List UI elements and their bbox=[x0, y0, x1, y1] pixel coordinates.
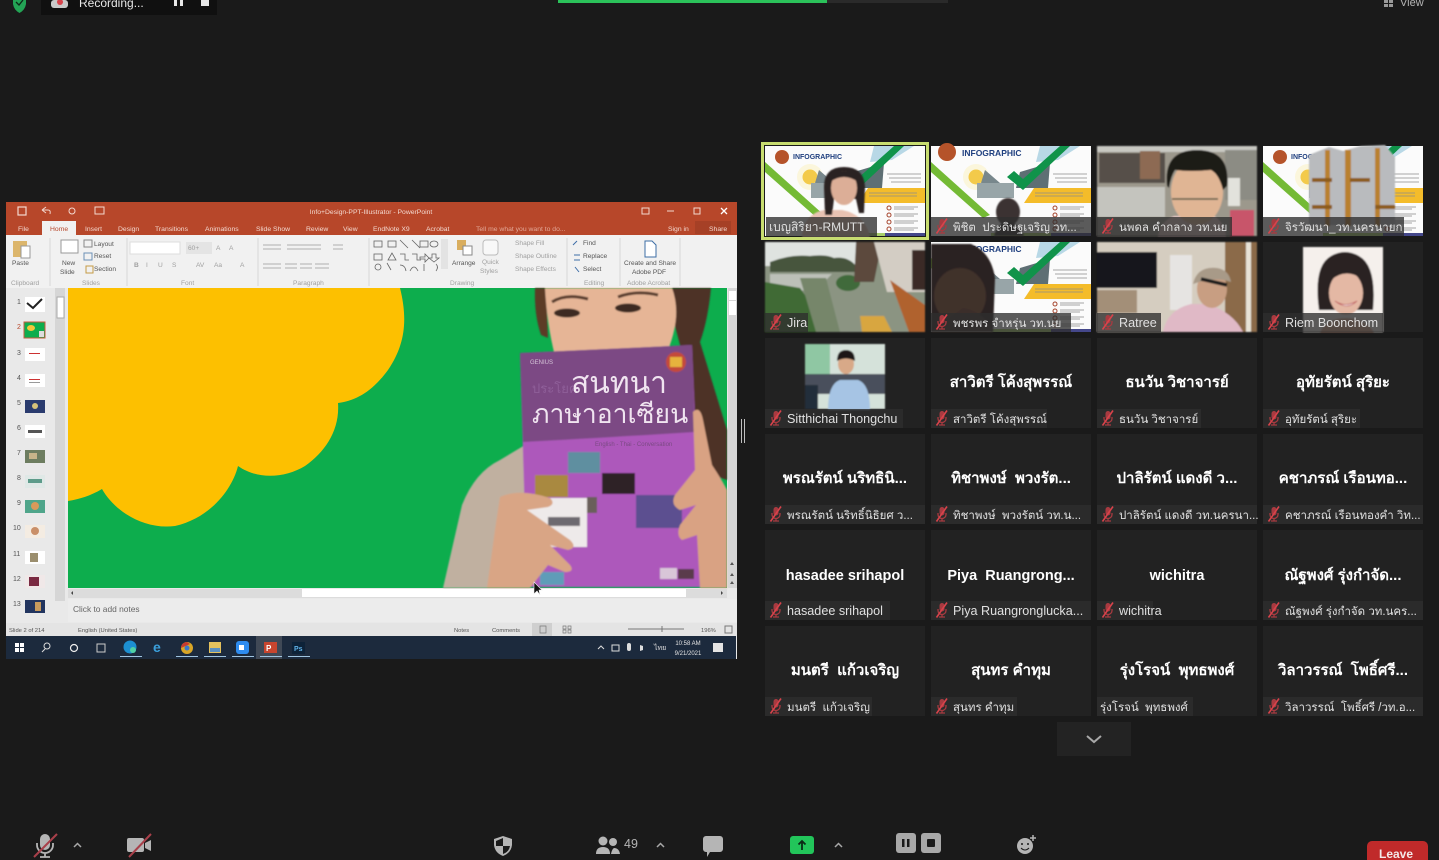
tile: พรณรัตน์ นริทธินิ...: พรณรัตน์ นริทธินิ... bbox=[783, 469, 907, 487]
tile: เบญสิริยา-RMUTT: เบญสิริยา-RMUTT bbox=[769, 220, 865, 234]
photo: woman holding a book: สนทนา bbox=[571, 367, 667, 400]
tile: สุนทร คำทุม bbox=[931, 626, 1091, 716]
ribbon: Select bbox=[583, 266, 601, 273]
tile: hasadee srihapol: hasadee srihapol bbox=[787, 604, 883, 618]
Windows taskbar: ไทย bbox=[653, 643, 666, 652]
tile: ปาลิรัตน์ แดงดี ว... bbox=[1097, 434, 1259, 524]
active speaker highlight bbox=[762, 144, 928, 238]
ribbon: Shape Fill bbox=[515, 240, 545, 247]
toolbar: chat bbox=[703, 836, 723, 857]
tile: สาวิตรี โค้งสุพรรณ์: สาวิตรี โค้งสุพรรณ์ bbox=[950, 372, 1072, 392]
tile: สาวิตรี โค้งสุพรรณ์ bbox=[931, 338, 1091, 428]
tile: เบญสิริยา-RMUTT: INFOGRAPHIC bbox=[793, 154, 842, 161]
toolbar: muted microphone bbox=[34, 834, 81, 857]
slide thumbnail pane: 10 bbox=[13, 525, 21, 532]
title bar: Design bbox=[118, 226, 139, 233]
tile: พิชิต ประดิษฐเจริญ: INFOGRAPHIC bbox=[962, 148, 1022, 158]
ribbon: U bbox=[158, 262, 163, 269]
slide thumbnail pane: 7 bbox=[17, 450, 21, 457]
tile: คชาภรณ์ เรือนทอ... bbox=[1263, 434, 1423, 524]
title bar: Info+Design-PPT-Illustrator - PowerPoint bbox=[310, 209, 432, 216]
ribbon: A bbox=[240, 262, 245, 269]
tile: ธนวัน วิชาจารย์ bbox=[1097, 338, 1257, 428]
panel: shared PowerPoint window bbox=[6, 202, 737, 659]
toolbar: stopped video bbox=[127, 834, 151, 857]
photo: woman holding a book: English - Thai - Conversation bbox=[595, 442, 672, 448]
tile: รุ่งโรจน์ พุทธพงศ์ bbox=[1097, 626, 1257, 716]
status bar: Slide 2 of 214 bbox=[9, 628, 45, 634]
ribbon: Replace bbox=[583, 253, 608, 260]
ribbon: AV bbox=[196, 262, 205, 269]
ribbon: Clipboard bbox=[11, 280, 40, 287]
tile: ปาลิรัตน์ แดงดี ว...: ปาลิรัตน์ แดงดี ว... bbox=[1117, 469, 1237, 487]
tile: พชรพร จำหรุ่น bbox=[931, 242, 1091, 332]
tile: วิลาวรรณ์ โพธิ์ศรี... bbox=[1263, 626, 1423, 716]
shoulder bbox=[443, 445, 525, 588]
tile: วิลาวรรณ์ โพธิ์ศรี...: วิลาวรรณ์ โพธิ์ศรี... bbox=[1277, 658, 1408, 679]
tile: สุนทร คำทุม: สุนทร คำทุม bbox=[971, 662, 1051, 680]
slide thumbnail pane bbox=[6, 288, 68, 613]
tile: พิชิต ประดิษฐเจริญ: พิชิต ประดิษฐเจริญ วท... bbox=[953, 221, 1077, 234]
status bar: Comments bbox=[492, 628, 520, 634]
tile: สาวิตรี โค้งสุพรรณ์: สาวิตรี โค้งสุพรรณ์ bbox=[953, 412, 1047, 426]
Windows taskbar: Ps bbox=[294, 646, 303, 653]
tile: สุนทร คำทุม: สุนทร คำทุม bbox=[953, 701, 1014, 714]
tile: เบญสิริยา-RMUTT bbox=[765, 146, 925, 236]
status bar: 196% bbox=[701, 628, 716, 634]
slide scrollbars bbox=[68, 288, 737, 598]
title bar: Review bbox=[306, 226, 328, 233]
leave button bbox=[1367, 841, 1428, 860]
title bar: View bbox=[343, 226, 358, 233]
tile: รุ่งโรจน์ พุทธพงศ์: รุ่งโรจน์ พุทธพงศ์ bbox=[1100, 700, 1189, 714]
tile: ธนวัน วิชาจารย์: ธนวัน วิชาจารย์ bbox=[1119, 412, 1198, 426]
ribbon: Adobe PDF bbox=[632, 269, 666, 276]
ribbon: Paste bbox=[12, 260, 29, 267]
title bar: Slide Show bbox=[256, 226, 290, 233]
tile: Sitthichai Thongchu bbox=[765, 338, 925, 428]
tile: Riem Boonchom: Riem Boonchom bbox=[1285, 316, 1378, 330]
Windows taskbar bbox=[6, 636, 736, 659]
tile: ณัฐพงศ์ รุ่งกำจัด...: ณัฐพงศ์ รุ่งกำจัด วท.นคร... bbox=[1285, 604, 1417, 618]
status bar: Notes bbox=[454, 628, 469, 634]
ribbon: Section bbox=[94, 266, 116, 273]
yellow scalloped shape bbox=[68, 288, 404, 527]
photo: woman holding a book: ภาษาอาเซียน bbox=[532, 399, 688, 429]
tile: hasadee srihapol bbox=[765, 530, 925, 620]
ribbon: Reset bbox=[94, 253, 111, 260]
panel: participant gallery bbox=[762, 143, 1423, 716]
slide thumbnail pane: 8 bbox=[17, 475, 21, 482]
title bar: Transitions bbox=[155, 226, 189, 233]
slide thumbnail pane: 13 bbox=[13, 601, 21, 608]
tile: ณัฐพงศ์ รุ่งกำจัด...: ณัฐพงศ์ รุ่งกำจัด... bbox=[1284, 566, 1402, 585]
tile: มนตรี แก้วเจริญ bbox=[765, 626, 925, 716]
slide thumbnail pane: 4 bbox=[17, 375, 21, 382]
slide thumbnail pane: 9 bbox=[17, 500, 21, 507]
tile: ณัฐพงศ์ รุ่งกำจัด... bbox=[1263, 530, 1423, 620]
ribbon: Create and Share bbox=[624, 260, 676, 267]
title bar: EndNote X9 bbox=[373, 226, 410, 233]
ribbon: Shape Outline bbox=[515, 253, 557, 260]
tile: ทิชาพงษ์ พวงรัต...: ทิชาพงษ์ พวงรัตน์ วท.น... bbox=[953, 508, 1081, 522]
slide thumbnail pane: 12 bbox=[13, 576, 21, 583]
ribbon: Adobe Acrobat bbox=[627, 280, 670, 287]
toolbar: reactions bbox=[1017, 835, 1036, 854]
tile: อุทัยรัตน์ สุริยะ: อุทัยรัตน์ สุริยะ bbox=[1296, 373, 1390, 392]
ribbon: S bbox=[172, 262, 177, 269]
next page chevron button bbox=[1057, 722, 1131, 756]
ribbon: New bbox=[62, 260, 75, 267]
tile: wichitra: wichitra bbox=[1149, 568, 1205, 584]
tile: จิรวัฒนา_วท.นครนายก: INFOGRA bbox=[1291, 154, 1323, 161]
Windows taskbar: e bbox=[153, 639, 161, 655]
ribbon: Drawing bbox=[450, 280, 475, 287]
tile: ทิชาพงษ์ พวงรัต...: ทิชาพงษ์ พวงรัต... bbox=[951, 469, 1071, 487]
ribbon: Layout bbox=[94, 241, 114, 248]
tile: Piya Ruangrong... bbox=[931, 530, 1091, 620]
hands bbox=[673, 410, 727, 588]
ribbon bbox=[6, 235, 737, 288]
face bbox=[545, 288, 676, 356]
title bar: Acrobat bbox=[426, 226, 450, 233]
toolbar: recording controls bbox=[896, 833, 941, 853]
photo: woman holding a book: ประโยค bbox=[532, 381, 578, 396]
tile: Sitthichai Thongchu: Sitthichai Thongchu bbox=[787, 412, 897, 426]
slide thumbnail pane: 3 bbox=[17, 350, 21, 357]
book cover bbox=[520, 345, 702, 587]
tile: Piya Ruangrong...: Piya Ruangrong... bbox=[947, 568, 1075, 584]
toolbar: share screen bbox=[790, 836, 842, 854]
ribbon: Slide bbox=[60, 269, 75, 276]
title bar: Tell me what you want to do... bbox=[476, 226, 566, 233]
tile: Ratree bbox=[1097, 242, 1257, 332]
Windows taskbar: P bbox=[266, 644, 272, 653]
title bar: File bbox=[18, 226, 29, 233]
status bar: English (United States) bbox=[78, 628, 137, 634]
tile: คชาภรณ์ เรือนทอ...: คชาภรณ์ เรือนทอ... bbox=[1279, 469, 1407, 487]
tile: พชรพร จำหรุ่น: พชรพร จำหรุ่น วท.นย bbox=[953, 317, 1061, 330]
tile: คชาภรณ์ เรือนทอ...: คชาภรณ์ เรือนทองคำ วิท... bbox=[1285, 508, 1421, 522]
photo: woman holding a book bbox=[443, 288, 727, 588]
tile: ปาลิรัตน์ แดงดี ว...: ปาลิรัตน์ แดงดี วท.นครนา... bbox=[1119, 508, 1259, 522]
title bar: Animations bbox=[205, 226, 239, 233]
status bar bbox=[6, 623, 737, 636]
ribbon: A bbox=[229, 245, 234, 252]
tile: Jira bbox=[765, 242, 925, 332]
notes pane bbox=[68, 599, 737, 622]
slide thumbnail pane: 6 bbox=[17, 425, 21, 432]
tile: ธนวัน วิชาจารย์: ธนวัน วิชาจารย์ bbox=[1125, 373, 1229, 391]
ribbon: Aa bbox=[214, 262, 222, 269]
ribbon: 60+ bbox=[188, 245, 199, 252]
hair bbox=[535, 288, 548, 338]
tile: พรณรัตน์ นริทธินิ... bbox=[765, 434, 925, 524]
tile: Piya Ruangrong...: Piya Ruangronglucka... bbox=[953, 604, 1083, 618]
Windows taskbar: 9/21/2021 bbox=[675, 651, 702, 657]
tile: มนตรี แก้วเจริญ: มนตรี แก้วเจริญ bbox=[787, 701, 870, 714]
top bar: security shield and recording indicator bbox=[13, 0, 217, 15]
ribbon: Paragraph bbox=[293, 280, 324, 287]
tile: ทิชาพงษ์ พวงรัต... bbox=[931, 434, 1091, 524]
top bar: view button bbox=[1384, 0, 1424, 9]
photo: woman holding a book: GENIUS bbox=[530, 360, 553, 366]
toolbar: participants bbox=[596, 836, 664, 854]
ribbon: B bbox=[134, 262, 139, 269]
tile: นพดล คำกลาง bbox=[1097, 146, 1257, 236]
ribbon: A bbox=[216, 245, 221, 252]
toolbar: security bbox=[494, 836, 512, 856]
tile: มนตรี แก้วเจริญ: มนตรี แก้วเจริญ bbox=[791, 661, 899, 679]
slide thumbnail pane: 5 bbox=[17, 400, 21, 407]
Windows taskbar: 10:58 AM bbox=[675, 641, 701, 647]
slide thumbnail pane: 1 bbox=[17, 299, 21, 306]
title bar: Home bbox=[50, 226, 68, 233]
tile: จิรวัฒนา_วท.นครนายก: จิรวัฒนา_วท.นครนายก bbox=[1285, 221, 1402, 234]
toolbar: participants: 49 bbox=[624, 837, 638, 851]
slide thumbnail pane: 11 bbox=[13, 551, 20, 558]
tile: Riem Boonchom bbox=[1263, 242, 1423, 332]
tile: wichitra bbox=[1097, 530, 1257, 620]
tile: จิรวัฒนา_วท.นครนายก bbox=[1263, 145, 1423, 236]
mouse cursor bbox=[534, 582, 542, 595]
title bar: Share bbox=[709, 226, 727, 233]
ribbon: I bbox=[146, 262, 148, 269]
ribbon: Styles bbox=[480, 268, 499, 275]
tile: อุทัยรัตน์ สุริยะ: อุทัยรัตน์ สุริยะ bbox=[1285, 412, 1357, 426]
slide canvas bbox=[68, 288, 727, 588]
ribbon: Shape Effects bbox=[515, 266, 557, 273]
window divider handle bbox=[742, 419, 744, 443]
tile: Jira: Jira bbox=[787, 316, 807, 330]
tile: พรณรัตน์ นริทธินิ...: พรณรัตน์ นริทธิ์นิธิยศ ว... bbox=[787, 506, 913, 522]
ribbon: Editing bbox=[584, 280, 604, 287]
tile: wichitra: wichitra bbox=[1118, 604, 1162, 618]
slide thumbnail pane: 2 bbox=[17, 324, 21, 331]
title bar: Insert bbox=[85, 226, 102, 233]
ribbon: Slides bbox=[82, 280, 101, 287]
title bar bbox=[6, 202, 737, 235]
tile: hasadee srihapol: hasadee srihapol bbox=[786, 568, 904, 584]
ribbon: Find bbox=[583, 240, 596, 247]
ribbon: Font bbox=[181, 280, 194, 287]
ribbon: Quick bbox=[482, 259, 500, 266]
tile: รุ่งโรจน์ พุทธพงศ์: รุ่งโรจน์ พุทธพงศ์ bbox=[1120, 660, 1235, 680]
title bar: Sign in bbox=[668, 226, 689, 233]
tile: พชรพร จำหรุ่น: INFOGRAPHIC bbox=[962, 244, 1022, 254]
tile: นพดล คำกลาง: นพดล คำกลาง วท.นย bbox=[1119, 221, 1227, 234]
notes pane: Click to add notes bbox=[73, 604, 140, 614]
top bar: sharing status strip bbox=[558, 0, 948, 3]
tile: อุทัยรัตน์ สุริยะ bbox=[1263, 338, 1423, 428]
tile: พิชิต ประดิษฐเจริญ bbox=[931, 143, 1091, 236]
tile: Ratree: Ratree bbox=[1119, 316, 1157, 330]
ribbon: Arrange bbox=[452, 260, 476, 267]
tile: วิลาวรรณ์ โพธิ์ศรี...: วิลาวรรณ์ โพธิ์ศรี /วท.อ... bbox=[1284, 698, 1415, 714]
